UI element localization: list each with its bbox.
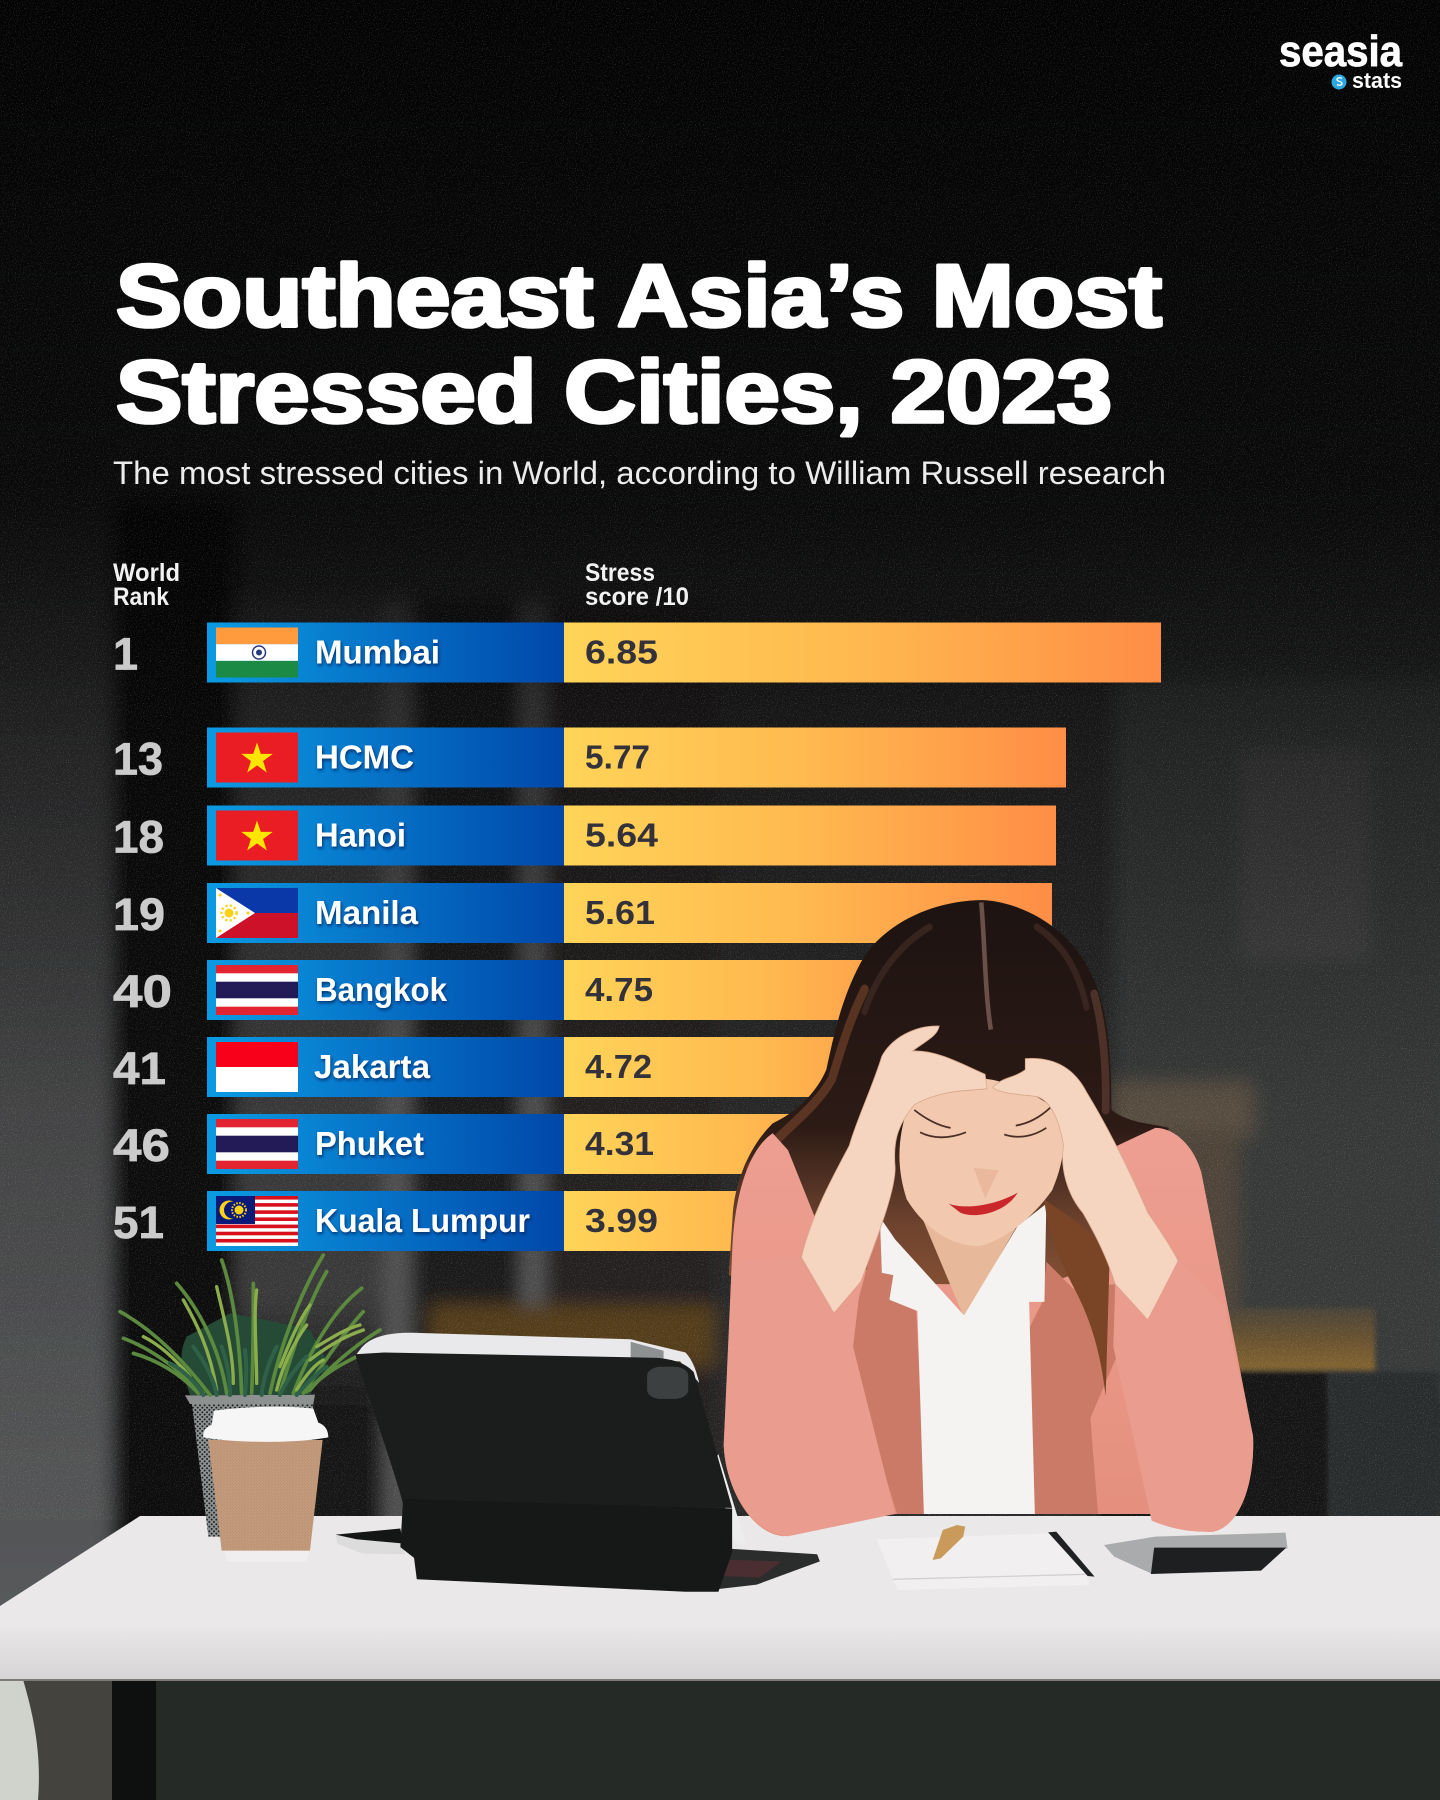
keyboard xyxy=(710,1549,820,1590)
flag: Vietnam xyxy=(216,810,298,860)
flag: Vietnam xyxy=(216,732,298,782)
bar row: Mumbai: 6.85 xyxy=(585,634,658,670)
black pen xyxy=(1048,1532,1095,1577)
hair xyxy=(729,900,1169,1351)
bar row: Hanoi: Hanoi xyxy=(315,816,406,854)
jacket xyxy=(724,1128,1253,1536)
bar row: HCMC: 13 xyxy=(113,734,163,784)
column header: world rank: Rank xyxy=(113,583,169,611)
bar row: Phuket: 46 xyxy=(113,1120,170,1171)
bar row: Phuket: Phuket xyxy=(315,1125,424,1162)
neck xyxy=(916,1204,1020,1318)
bar row: Jakarta xyxy=(113,1037,975,1097)
bar row: Kuala Lumpur: Kuala Lumpur xyxy=(315,1202,530,1239)
stand xyxy=(400,1499,732,1592)
bar row: Manila: 5.61 xyxy=(585,894,655,931)
title xyxy=(116,246,1162,441)
bar row: Kuala Lumpur xyxy=(113,1191,912,1251)
coffee cup xyxy=(203,1407,328,1562)
sleeves xyxy=(724,1257,1253,1536)
bar row: Hanoi: 5.64 xyxy=(585,816,659,854)
title: Southeast Asia’s Most xyxy=(116,246,1162,345)
bar row: Phuket xyxy=(113,1114,940,1174)
hair parting xyxy=(981,902,991,1030)
face xyxy=(899,1079,1064,1246)
hair strand falling on right xyxy=(1044,1199,1109,1396)
bar row: Kuala Lumpur: 3.99 xyxy=(585,1202,658,1239)
flag: Indonesia xyxy=(216,1042,298,1092)
title: Stressed Cities, 2023 xyxy=(116,342,1112,441)
bar row: HCMC: HCMC xyxy=(315,738,414,776)
subtitle: The most stressed cities in World, according to William Russell research xyxy=(113,455,1166,491)
bar row: Phuket: 4.31 xyxy=(585,1125,654,1162)
bar row: Manila: 19 xyxy=(113,889,165,940)
shirt xyxy=(880,1204,1046,1514)
tablet back xyxy=(355,1352,732,1508)
column header: world rank xyxy=(113,559,180,611)
white top edge xyxy=(356,1333,699,1383)
right forearm and hand xyxy=(993,1058,1178,1320)
logo: seasia stats: stats xyxy=(1352,68,1402,93)
desk xyxy=(0,1516,1440,1800)
flag: Thailand xyxy=(216,965,298,1015)
flag: Thailand xyxy=(216,1119,298,1169)
column header: stress score: Stress xyxy=(585,559,655,587)
bar row: Jakarta: 41 xyxy=(113,1043,166,1094)
flag: Philippines xyxy=(216,888,298,938)
notepad and pens xyxy=(877,1525,1095,1590)
column header: stress score: score /10 xyxy=(585,583,689,611)
bar row: Jakarta: 4.72 xyxy=(585,1048,652,1085)
bar row: Hanoi xyxy=(113,806,1056,866)
bar row: Bangkok: 40 xyxy=(113,966,172,1017)
icon: logo badge xyxy=(1332,74,1346,90)
eyes and mouth xyxy=(914,1108,1050,1215)
flag: Malaysia xyxy=(216,1196,298,1246)
tablet on stand xyxy=(336,1333,820,1592)
calculator xyxy=(1104,1533,1288,1574)
column header: stress score xyxy=(585,559,689,611)
bar row: Hanoi: 18 xyxy=(113,812,164,862)
bar row: Bangkok: Bangkok xyxy=(315,971,448,1008)
bar row: Mumbai: Mumbai xyxy=(315,634,440,670)
bar row: Mumbai xyxy=(113,622,1161,682)
bar row: Bangkok xyxy=(113,960,978,1020)
logo: seasia stats: seasia xyxy=(1279,27,1402,76)
column header: world rank: World xyxy=(113,559,180,587)
bar row: Jakarta: Jakarta xyxy=(314,1048,431,1085)
jacket lapels xyxy=(845,1217,1121,1514)
bar row: Manila xyxy=(113,883,1052,943)
logo: seasia stats xyxy=(1279,27,1402,93)
left forearm and hand xyxy=(801,1026,987,1313)
bar row: Bangkok: 4.75 xyxy=(585,971,653,1008)
camera xyxy=(647,1367,688,1399)
hair highlights xyxy=(750,927,1106,1168)
gold pen xyxy=(933,1525,965,1560)
plant in mesh pot xyxy=(120,1255,380,1537)
mesh pot xyxy=(185,1395,315,1537)
phone xyxy=(336,1529,405,1554)
bar row: Mumbai: 1 xyxy=(113,628,138,680)
flag: India xyxy=(216,628,298,678)
bar row: Kuala Lumpur: 51 xyxy=(113,1197,164,1248)
bar row: HCMC xyxy=(113,728,1066,788)
woman with head in hands xyxy=(724,900,1253,1536)
bar row: Manila: Manila xyxy=(315,894,419,931)
bar row: HCMC: 5.77 xyxy=(585,738,650,776)
